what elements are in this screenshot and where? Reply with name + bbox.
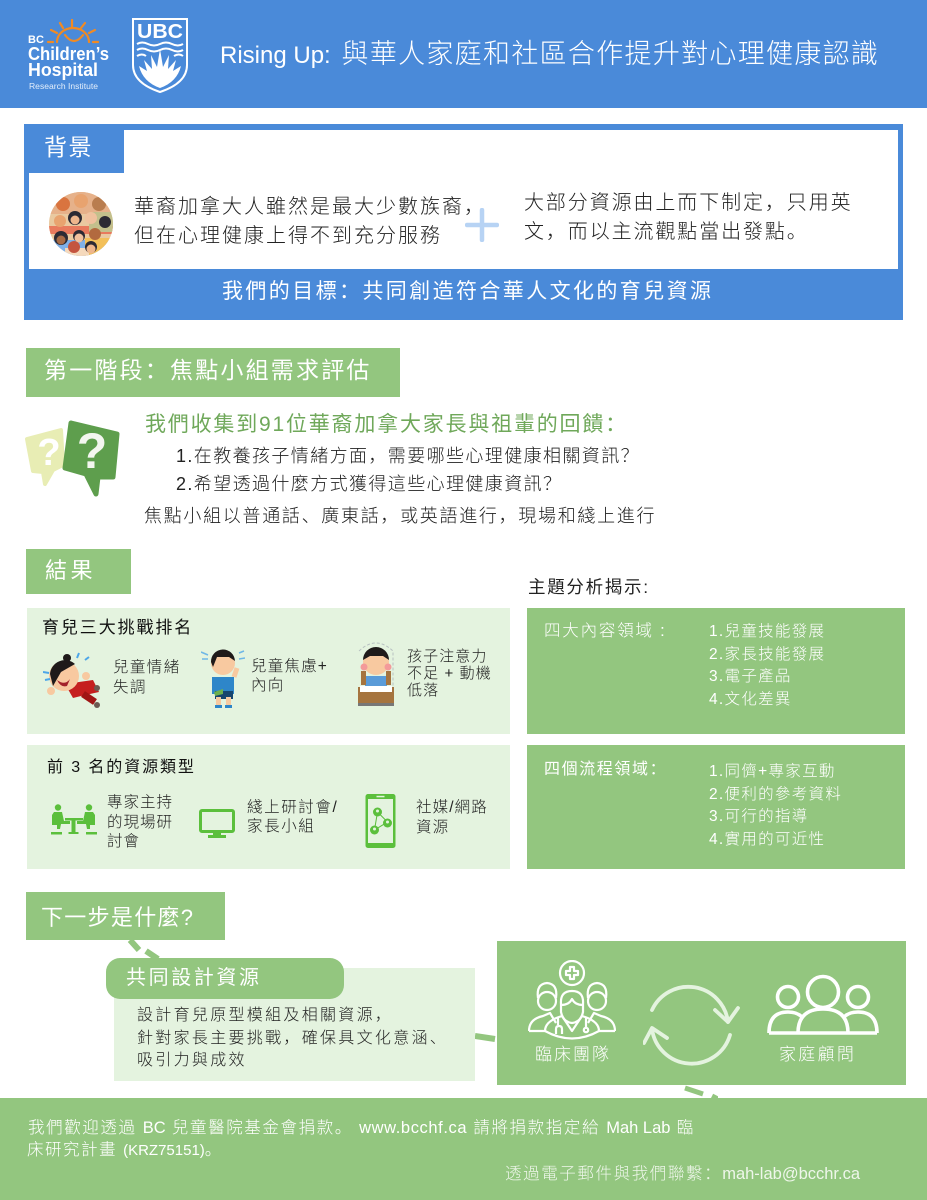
description text: 吸引力與成效 xyxy=(137,1052,247,1069)
text: webinar or parent group: 家長小組 xyxy=(247,818,315,835)
white content area xyxy=(29,130,898,269)
icon: exchange arrows xyxy=(643,984,740,1066)
icon: plus xyxy=(465,208,499,242)
panel heading: 前 3 名的資源類型 xyxy=(47,759,196,776)
heading pill: co-design resources xyxy=(106,958,344,999)
contact email: 透過電子郵件與我們聯繫：mah-lab@bcchr.ca xyxy=(505,1165,860,1183)
panel: four content domains xyxy=(527,608,905,734)
connector: next step to co-design xyxy=(128,940,160,958)
icon: smartphone network xyxy=(366,794,396,848)
text: attention and motivation: 不足 + 動機 xyxy=(407,665,492,682)
footer xyxy=(0,1098,927,1200)
description text: 針對家長主要挑戰，確保具文化意涵、 xyxy=(137,1030,448,1047)
text: expert-led workshop xyxy=(107,794,173,850)
panel: top three parenting challenges xyxy=(27,608,510,734)
logo: BC Children's Hospital: Research Institute xyxy=(29,81,98,91)
description text: 設計育兒原型模組及相關資源， xyxy=(137,1007,393,1024)
icon: anxious boy xyxy=(201,650,245,708)
text: emotional dysregulation: 失調 xyxy=(113,678,147,696)
icon: clinical team xyxy=(528,960,616,1040)
icon: in-person workshop xyxy=(51,804,97,834)
logo: UBC shield: UBC xyxy=(137,21,183,43)
content domain list: 2.家長技能發展 xyxy=(709,646,825,662)
process domain list: 2.便利的參考資料 xyxy=(709,786,842,802)
donation text: 我們歡迎透過 BC 兒童醫院基金會捐款。 www.bcchf.ca 請將捐款指定給 Mah Lab 臨 xyxy=(28,1118,695,1136)
connector: co-design to team xyxy=(475,1033,496,1042)
text: social media and web: 社媒/網路 xyxy=(416,799,488,816)
donation text: 床研究計畫 (KRZ75151)。 xyxy=(27,1140,223,1158)
icon: family advisors xyxy=(767,974,879,1035)
heading: phase one: 第一階段：焦點小組需求評估 xyxy=(44,357,372,383)
text: anxiety and introversion xyxy=(251,658,328,694)
heading: results: 結果 xyxy=(45,558,96,583)
goal statement: 我們的目標：共同創造符合華人文化的育兒資源 xyxy=(222,280,713,303)
process domain list: 3.可行的指導 xyxy=(709,808,809,825)
content domain list: 3.電子產品 xyxy=(709,668,792,685)
text: emotional dysregulation xyxy=(113,658,181,696)
tab: background heading: 背景 xyxy=(44,134,93,160)
label: family advisors: 家庭顧問 xyxy=(779,1045,856,1064)
text: feedback from parents: 我們收集到91位華裔加拿大家長與祖輩的回饋： xyxy=(145,413,628,436)
process domain list: 1.同儕+專家互動 xyxy=(709,762,836,780)
icon: computer monitor xyxy=(199,809,235,838)
text: top-down resources: 文，而以主流觀點當出發點。 xyxy=(524,221,809,243)
text: under-served community xyxy=(134,196,486,247)
panel heading: 四大內容領域 : xyxy=(544,622,667,640)
heading: what is next xyxy=(26,892,225,940)
text: emotional dysregulation: 兒童情緒 xyxy=(113,659,181,676)
text: anxiety and introversion: 兒童焦慮+ xyxy=(251,658,328,675)
text: top-down resources: 大部分資源由上而下制定，只用英 xyxy=(524,192,852,214)
process domain list: 4.實用的可近性 xyxy=(709,830,825,848)
panel heading: 四個流程領域： xyxy=(544,761,667,778)
text: expert-led workshop: 的現場研 xyxy=(107,814,173,830)
icon: crying girl xyxy=(43,652,100,708)
text: social media and web: 資源 xyxy=(416,819,449,836)
text: under-served community: 華裔加拿大人雖然是最大少數族裔， xyxy=(134,196,486,218)
content domain list xyxy=(709,622,825,708)
icon: question bubbles xyxy=(25,420,120,496)
heading: what is next: 下一步是什麼? xyxy=(41,905,194,930)
question two: 2.希望透過什麼方式獲得這些心理健康資訊？ xyxy=(176,474,562,494)
text: expert-led workshop: 專家主持 xyxy=(107,794,173,811)
text: focus group language: 焦點小組以普通話、廣東話，或英語進行，現場和綫上進行 xyxy=(144,506,656,526)
label: clinical team: 臨床團隊 xyxy=(535,1045,611,1064)
heading: phase one xyxy=(26,348,400,397)
panel heading: 育兒三大挑戰排名 xyxy=(42,618,193,637)
heading pill: co-design resources: 共同設計資源 xyxy=(126,967,262,989)
text: attention and motivation xyxy=(407,648,492,699)
text: attention and motivation: 低落 xyxy=(407,682,439,699)
header band xyxy=(0,0,927,108)
heading: thematic analysis: 主題分析揭示: xyxy=(528,577,650,597)
icon: question bubbles: ? xyxy=(37,432,61,474)
description text xyxy=(137,1006,448,1069)
donation text xyxy=(27,1118,695,1158)
text: anxiety and introversion: 內向 xyxy=(251,677,284,694)
logo: BC Children's Hospital xyxy=(28,18,109,91)
logo: UBC shield xyxy=(132,18,188,93)
title: Rising Up: 與華人家庭和社區合作提升對心理健康認識 xyxy=(220,39,879,69)
logo: BC Children's Hospital: BC xyxy=(28,34,44,46)
panel: co-design description xyxy=(114,968,475,1081)
heading: results xyxy=(26,549,131,594)
text: social media and web xyxy=(416,798,488,836)
logo: BC Children's Hospital: Hospital xyxy=(28,60,98,80)
icon: question bubbles: ? xyxy=(77,423,107,479)
text: attention and motivation: 孩子注意力 xyxy=(407,648,488,665)
panel: top three resource types xyxy=(27,745,510,869)
logo: BC Children's Hospital: Children’s xyxy=(28,44,109,64)
content domain list: 4.文化差異 xyxy=(709,690,792,708)
text: under-served community: 但在心理健康上得不到充分服務 xyxy=(134,225,442,247)
panel: clinical team and family advisors xyxy=(497,941,906,1085)
panel: background xyxy=(24,124,903,320)
icon: boy studying xyxy=(358,642,394,706)
icon: crowd of people xyxy=(49,192,113,256)
question one: 1.在教養孩子情緒方面，需要哪些心理健康相關資訊？ xyxy=(176,446,640,466)
tab: background heading xyxy=(24,124,124,173)
text: top-down resources xyxy=(524,192,852,243)
panel: four process domains xyxy=(527,745,905,869)
text: expert-led workshop: 討會 xyxy=(107,833,140,850)
process domain list xyxy=(709,762,842,848)
connector: team to footer xyxy=(684,1086,718,1098)
text: webinar or parent group xyxy=(247,799,338,835)
content domain list: 1.兒童技能發展 xyxy=(709,623,825,640)
text: webinar or parent group: 綫上研討會/ xyxy=(247,799,338,816)
